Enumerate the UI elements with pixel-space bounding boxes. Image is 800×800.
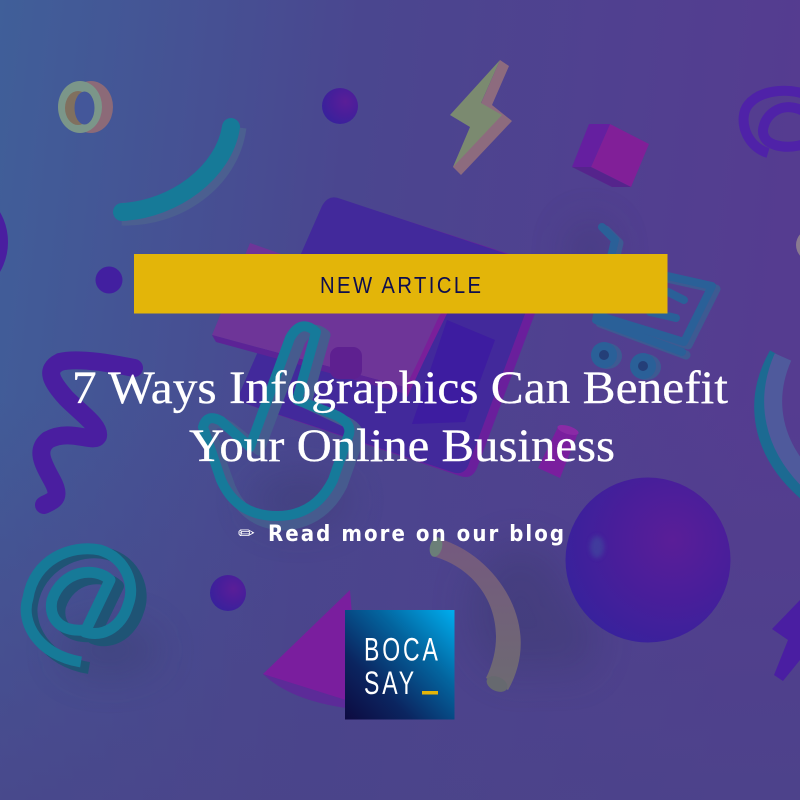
icon: small sphere bottom bbox=[210, 575, 246, 611]
title: 7 Ways Infographics Can Benefit bbox=[72, 362, 728, 414]
icon: right tan circle bbox=[796, 229, 800, 261]
banner label: NEW ARTICLE bbox=[320, 272, 481, 298]
call to action: ✏ bbox=[238, 521, 255, 545]
icon: cart wheels bbox=[591, 342, 661, 380]
icon: shopping cart bbox=[596, 227, 716, 355]
call to action: Read more on our blog bbox=[268, 521, 564, 546]
title bbox=[72, 362, 728, 472]
soft shadows bbox=[60, 222, 612, 675]
icon: at sign top right bbox=[744, 91, 800, 153]
icon: purple squiggle bbox=[41, 360, 134, 505]
icon: lightning bottom right bbox=[772, 600, 800, 681]
banner: new article bbox=[134, 254, 668, 314]
icon: magenta card bbox=[212, 243, 445, 396]
icon: cone bbox=[263, 590, 354, 708]
icon: tablet bbox=[239, 197, 552, 477]
icon: at sign bottom left bbox=[26, 549, 141, 668]
icon: teal arc bbox=[122, 127, 235, 214]
icon: ring bbox=[58, 81, 113, 133]
icon: small sphere left bbox=[96, 266, 122, 294]
icon: curved tube bbox=[428, 536, 521, 695]
icon: left sphere bbox=[0, 182, 8, 302]
logo: Bocasay: SAY bbox=[364, 665, 417, 701]
title: Your Online Business bbox=[189, 420, 615, 472]
icon: hand cursor bbox=[203, 326, 358, 525]
logo: Bocasay: BOCA bbox=[364, 632, 441, 667]
icon: small block behind cursor bbox=[330, 347, 362, 379]
icon: big sphere bbox=[566, 478, 730, 642]
icon: right arc bbox=[766, 356, 800, 490]
icon: lightning bolt bbox=[450, 60, 512, 175]
icon: cube bbox=[572, 124, 649, 187]
icon: magenta cylinder bbox=[538, 423, 580, 478]
logo: Bocasay bbox=[345, 610, 454, 720]
icon: small sphere top bbox=[322, 88, 358, 124]
